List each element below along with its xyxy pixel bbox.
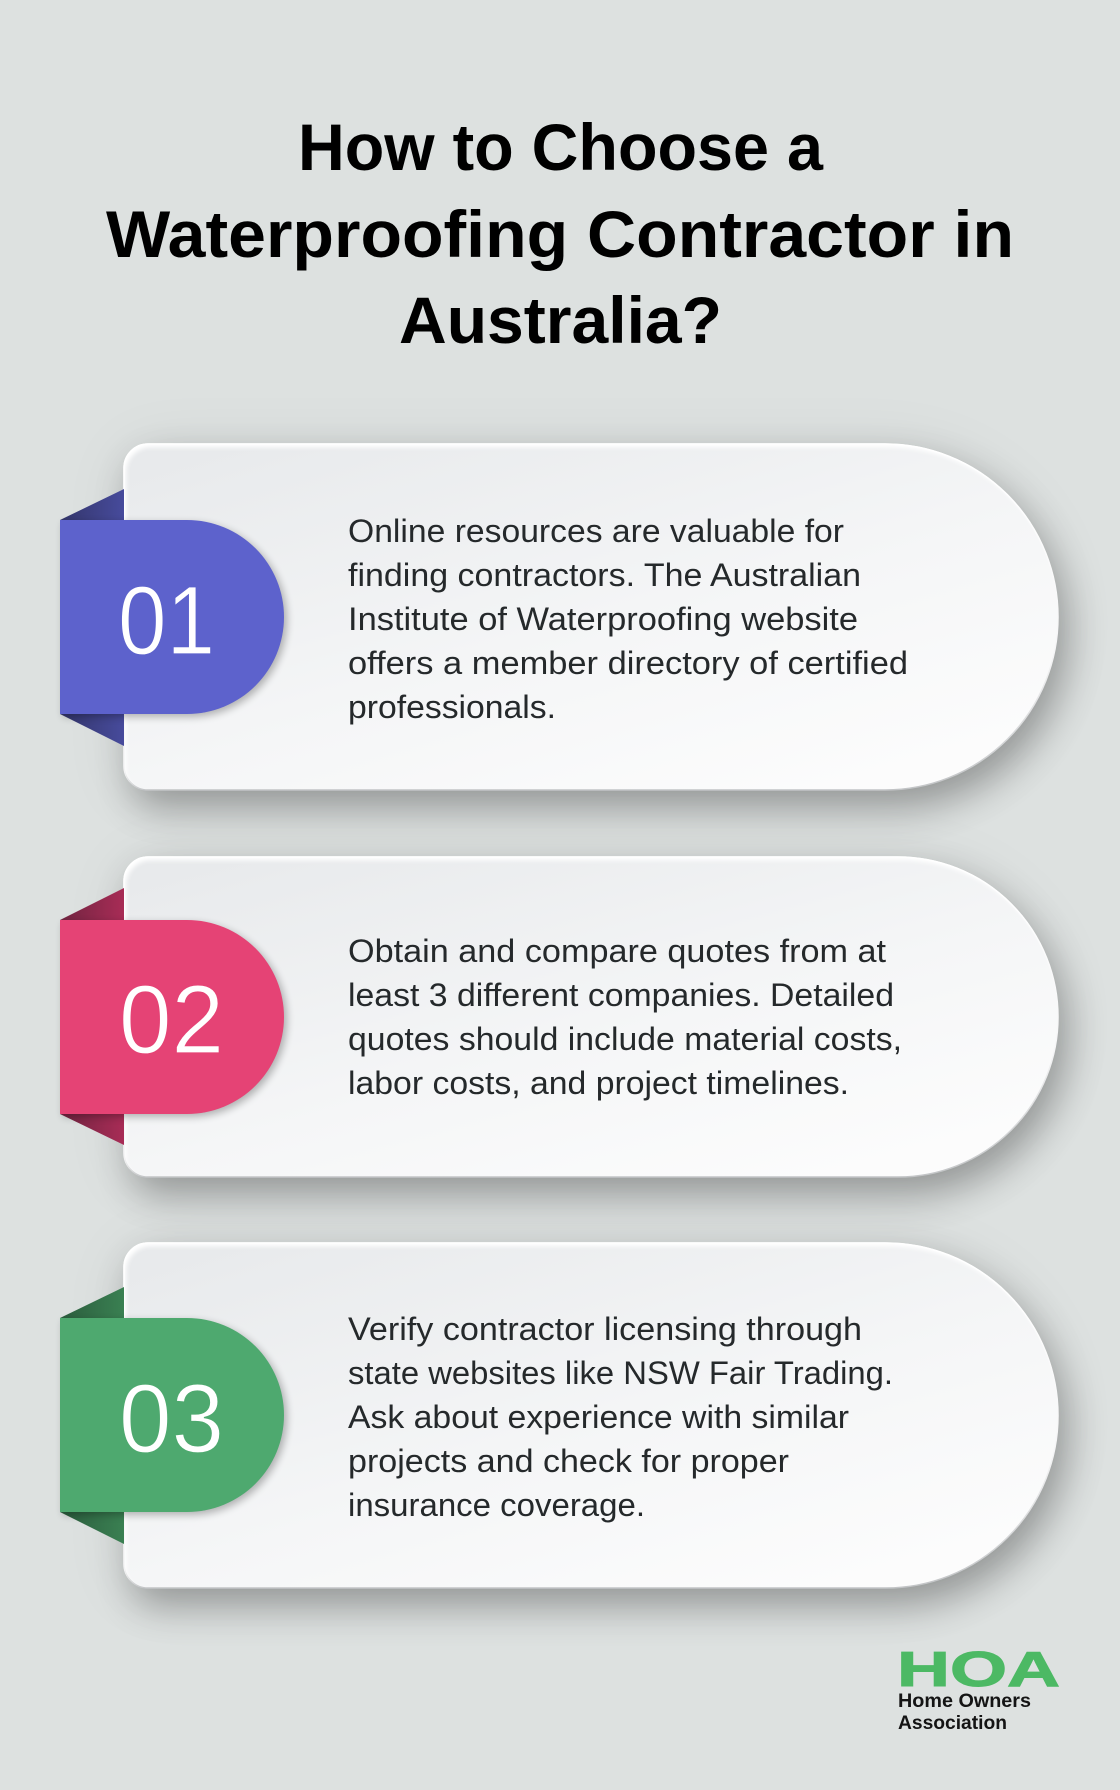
panel: step 1 — [60, 444, 1058, 790]
number badge 2: 02 — [119, 965, 224, 1074]
number badge 1 — [60, 520, 284, 714]
number badge 3: 03 — [119, 1364, 224, 1473]
ribbon fold bottom 2 — [60, 1114, 124, 1145]
title: Waterproofing Contractor in — [106, 197, 1014, 271]
step 3 description: Ask about experience with similar — [348, 1399, 849, 1435]
card 1 background — [124, 444, 1058, 790]
logo: Home Owners Association: Association — [898, 1712, 1007, 1734]
step 2 description: Obtain and compare quotes from at — [348, 933, 886, 969]
number badge 2 — [60, 920, 284, 1114]
step 1 description: professionals. — [348, 689, 556, 725]
step 1 description — [348, 513, 908, 725]
logo: Home Owners Association — [897, 1643, 1060, 1734]
step 1 description: finding contractors. The Australian — [348, 557, 861, 593]
number badge 3 — [60, 1318, 284, 1512]
logo: Home Owners Association: HOA — [897, 1643, 1060, 1697]
ribbon fold top 2 — [60, 888, 124, 920]
ribbon fold bottom 3 — [60, 1512, 124, 1544]
step 3 description: insurance coverage. — [348, 1487, 645, 1523]
title: How to Choose a — [298, 110, 824, 184]
step 3 description: projects and check for proper — [348, 1443, 789, 1479]
logo: Home Owners Association: Home Owners — [898, 1690, 1031, 1712]
step 2 description — [348, 933, 902, 1101]
step 1 description: offers a member directory of certified — [348, 645, 908, 681]
step 3 description: Verify contractor licensing through — [348, 1311, 862, 1347]
number badge 1: 01 — [118, 566, 215, 675]
step 1 description: Online resources are valuable for — [348, 513, 844, 549]
panel: step 3 — [60, 1243, 1058, 1588]
step 2 description: quotes should include material costs, — [348, 1021, 902, 1057]
ribbon fold top 3 — [60, 1287, 124, 1318]
step 1 description: Institute of Waterproofing website — [348, 601, 858, 637]
ribbon fold bottom 1 — [60, 714, 124, 746]
step 3 description — [348, 1311, 893, 1523]
card 2 background — [124, 857, 1058, 1177]
title: Australia? — [399, 283, 722, 357]
panel: step 2 — [60, 857, 1058, 1177]
step 2 description: labor costs, and project timelines. — [348, 1065, 849, 1101]
ribbon fold top 1 — [60, 489, 124, 520]
title — [106, 110, 1014, 357]
step 2 description: least 3 different companies. Detailed — [348, 977, 894, 1013]
step 3 description: state websites like NSW Fair Trading. — [348, 1355, 893, 1391]
card 3 background — [124, 1243, 1058, 1588]
